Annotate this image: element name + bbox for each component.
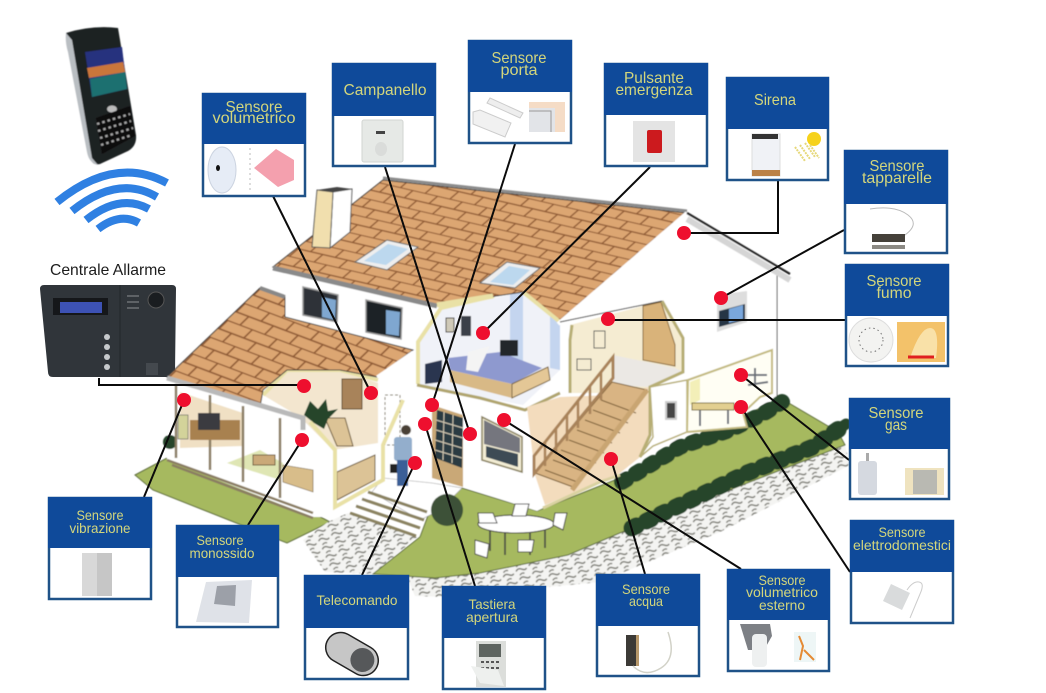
heading: Centrale Allarme: Centrale Allarme [50,262,166,279]
illustration: cutaway house [135,178,850,597]
panel: Sensore porta [468,40,572,143]
garden table [475,504,567,558]
bedroom [417,292,560,410]
icon: smartphone [66,27,136,165]
panel: Sensore tapparelle: tapparelle [862,170,932,187]
rug [227,450,283,480]
furniture: sunroom [178,379,400,500]
lower side wall [640,380,687,457]
panel: Sirena [726,77,829,180]
panel: Sensore volumetrico esterno: esterno [759,597,805,613]
panel: Sensore fumo: fumo [876,285,912,302]
panel: Pulsante emergenza: Pulsante [624,70,684,87]
living room back wall [263,370,378,450]
panel: Sensore elettrodomestici [850,520,954,623]
right eave [687,213,790,280]
trim: cutaway edges [263,370,403,507]
panel: Sensore acqua [596,574,700,676]
panel: Sensore gas: Sensore [868,405,924,422]
panel: Telecomando: Telecomando [316,592,398,608]
main roof [273,178,687,324]
panel: Sensore tapparelle: Sensore [870,158,925,175]
person [390,425,412,486]
panel: Sensore gas: gas [885,417,907,434]
wall window [666,402,676,419]
panel: Sensore tapparelle [844,150,948,253]
panel: Sensore acqua: Sensore [622,581,670,597]
under-stair area [527,385,650,505]
left lawn [135,458,330,543]
left roof [167,288,413,430]
panel: Sensore volumetrico esterno [727,569,830,671]
chimney [312,187,352,248]
panel: Tastiera apertura: apertura [466,609,518,625]
panel: Sensore vibrazione [48,497,152,599]
panel: Sensore acqua: acqua [629,593,663,609]
panel: Sensore fumo [845,264,949,366]
roller shutter window [482,417,522,472]
paving at entrance [372,478,462,520]
panel: Sensore monossido [176,525,279,627]
panel: Tastiera apertura [442,586,546,689]
panel: Sensore volumetrico: Sensore [226,99,283,116]
staircase [534,357,647,508]
hedges [163,402,846,528]
panel: Sensore elettrodomestici: Sensore [878,524,926,540]
panel: Sensore volumetrico: volumetrico [212,110,296,127]
panel: Pulsante emergenza: emergenza [616,82,693,99]
panel: Sensore elettrodomestici: elettrodomestici [853,537,951,553]
middle lawn [373,398,845,578]
upstairs room [560,301,684,457]
sunroom back wall [180,392,243,448]
panel: Sensore vibrazione: vibrazione [70,520,131,536]
panel: Sensore monossido: monossido [190,545,255,561]
panel: Sensore monossido: Sensore [196,532,244,548]
gravel strip [405,445,850,597]
panel: Sensore volumetrico [202,93,306,196]
panel: Campanello: Campanello [344,82,427,99]
kitchen cutaway [687,350,772,432]
panel: Sensore porta: Sensore [492,50,547,67]
right gable wall line [776,272,778,400]
panel: Sensore fumo: Sensore [866,273,922,290]
glazing posts and floor [167,384,313,518]
panel: Sensore vibrazione: Sensore [76,507,124,523]
upper windows [303,287,402,339]
panel: Sirena: Sirena [754,92,796,109]
icon: wifi signal [57,173,167,229]
house walls [167,213,777,517]
panel: Pulsante emergenza [604,63,708,166]
panel: Sensore gas [849,398,950,499]
gable window [717,291,747,332]
gravel path [303,513,417,574]
panel: Telecomando [304,575,409,681]
panel: Sensore volumetrico esterno: volumetrico [746,584,818,600]
panel: Sensore volumetrico esterno: Sensore [758,572,806,588]
icon: alarm control panel [40,285,176,377]
panel: Campanello [332,63,436,166]
panel: Tastiera apertura: Tastiera [468,596,516,612]
panel: Sensore porta: porta [500,62,538,79]
connector lines [99,144,850,586]
skylight right [480,262,540,288]
sensor location dots [177,226,748,470]
skylight left [355,240,418,270]
entry steps [350,492,427,536]
front door [432,405,463,487]
